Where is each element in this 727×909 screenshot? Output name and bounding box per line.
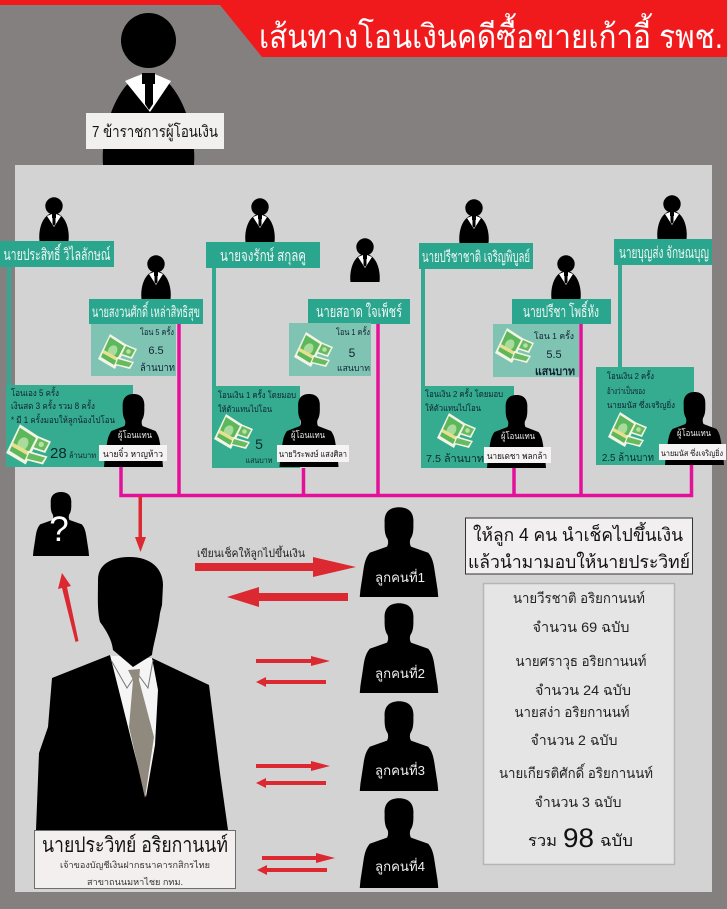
proxy figure: นายวิระพงษ์ แสงศิลา: ผู้โอนแทน	[291, 430, 325, 441]
panel: transfer details 3: ให้ตัวแทนไปโอน	[218, 404, 272, 414]
panel: cheque counts: จำนวน 69 ฉบับ	[532, 619, 630, 635]
figure: child 2: ลูกคนที่2	[375, 665, 425, 682]
caption: นายประวิทย์ อริยกานนท์: นายประวิทย์ อริยกานนท์	[42, 833, 228, 857]
panel: transfer details 4	[289, 323, 371, 376]
panel: transfer details 4: 5	[349, 346, 356, 360]
panel: transfer details 7: 2.5 ล้านบาท	[602, 452, 654, 464]
icon: person	[245, 198, 275, 242]
panel: transfer details 2: 6.5	[148, 345, 164, 357]
panel: transfer details 2: ล้านบาท	[140, 362, 175, 374]
panel: cheque counts: นายสง่า อริยกานนท์	[514, 704, 630, 720]
name label: นายจงรักษ์ สกุลคู	[220, 246, 306, 266]
column 5: นายปรีชาชาติ เจริญพิบูลย์	[419, 199, 533, 269]
figure: main account holder	[36, 557, 228, 830]
callout: instruction to children: ให้ลูก 4 คน นำเช็คไปขึ้นเงิน	[473, 522, 683, 546]
proxy figure: นายมนัส ซึ่งเจริญยิ่ง	[659, 392, 726, 465]
name label: นายประสิทธิ์ วิไลลักษณ์	[4, 243, 111, 264]
title banner	[0, 0, 727, 57]
icon: person	[141, 255, 171, 299]
proxy figure: นายวิระพงษ์ แสงศิลา: นายวิระพงษ์ แสงศิลา	[279, 449, 347, 459]
panel: transfer details 1	[6, 385, 133, 467]
panel: transfer details 1: * มี 1 ครั้งมอบให้ลูกน้องไปโอน	[11, 413, 115, 426]
panel: transfer details 3	[212, 386, 300, 468]
panel: cheque counts: จำนวน 3 ฉบับ	[534, 794, 622, 810]
column 3: นายจงรักษ์ สกุลคู	[206, 198, 320, 268]
panel: transfer details 6: แสนบาท	[535, 366, 575, 378]
arrows: child 3	[256, 761, 330, 788]
panel: transfer details 1: ล้านบาท	[69, 451, 96, 460]
panel: transfer details 2: โอน 5 ครั้ง	[140, 326, 174, 337]
proxy figure: นายเดชา พลกล้า: ผู้โอนแทน	[501, 431, 535, 442]
icon: person	[551, 255, 581, 299]
column 2: นายสงวนศักดิ์ เหล่าสิทธิสุข	[89, 255, 203, 324]
panel: transfer details 5: 7.5 ล้านบาท	[426, 453, 484, 465]
panel: cheque counts: จำนวน 24 ฉบับ	[535, 682, 631, 698]
panel: transfer details 1: โอนเอง 5 ครั้ง	[11, 386, 59, 398]
panel: transfer details 7	[596, 367, 694, 465]
name label: นายปรีชาชาติ เจริญพิบูลย์	[422, 248, 530, 267]
panel: transfer details 2	[91, 324, 176, 376]
panel: transfer details 4: แสนบาท	[337, 363, 370, 373]
icon: person	[459, 199, 489, 243]
panel: transfer details 3: 5	[255, 436, 263, 452]
arrows: child 4	[257, 853, 335, 875]
panel: cheque counts	[484, 584, 674, 864]
proxy figure: นายเดชา พลกล้า: นายเดชา พลกล้า	[487, 451, 547, 461]
icon: person	[350, 238, 380, 282]
panel: cheque counts: นายศราวุธ อริยกานนท์	[516, 653, 646, 670]
icon: person	[657, 195, 687, 239]
proxy figure: นายมนัส ซึ่งเจริญยิ่ง: ผู้โอนแทน	[677, 428, 711, 439]
icon: unknown person	[33, 492, 89, 556]
caption: นายประวิทย์ อริยกานนท์: สาขาถนนมหาไชย กทม.	[87, 877, 183, 887]
panel: cheque counts: ฉบับ	[600, 833, 633, 850]
panel: transfer details 6: 5.5	[546, 349, 562, 361]
column 4: นายสอาด ใจเพ็ชร์	[308, 238, 410, 324]
name label: นายปรีชา โพธิ์หัง	[523, 300, 599, 321]
panel: transfer details 7: นายมนัส ซึ่งเจริญยิ่ง	[607, 399, 675, 410]
panel: cheque counts: จำนวน 2 ฉบับ	[530, 732, 618, 748]
proxy figure: นายจิ๋ว หาญห้าว	[99, 394, 167, 467]
callout: instruction to children: แล้วนำมามอบให้นายประวิทย์	[468, 551, 690, 572]
panel: transfer details 5	[421, 386, 514, 468]
icon: person	[39, 197, 69, 241]
panel: transfer details 7: อ้างว่าเป็นของ	[607, 385, 645, 396]
figure: child 1: ลูกคนที่1	[375, 569, 425, 586]
panel: cheque counts: นายวีรชาติ อริยกานนท์	[513, 590, 645, 606]
arrows: child 1	[195, 557, 356, 607]
teal connector lines	[7, 265, 622, 386]
panel: transfer details 5: ให้ตัวแทนไปโอน	[425, 403, 481, 413]
panel: transfer details 1: เงินสด 3 ครั้ง รวม 8 ครั้ง	[11, 399, 95, 411]
panel: cheque counts: รวม	[528, 833, 557, 850]
column 7: นายบุญส่ง จักษณบุญ	[614, 195, 712, 265]
panel: transfer details 3: โอนเงิน 1 ครั้ง โดยมอบ	[218, 389, 296, 400]
main panel	[15, 165, 712, 892]
proxy figure: นายจิ๋ว หาญห้าว: ผู้โอนแทน	[118, 430, 152, 441]
icon: 7 officials figure with caption	[86, 13, 224, 165]
figure: child 1	[360, 507, 438, 597]
figure: child 2	[360, 603, 438, 693]
name label: นายสงวนศักดิ์ เหล่าสิทธิสุข	[92, 301, 200, 322]
figure: child 3: ลูกคนที่3	[375, 762, 425, 779]
figure: child 3	[360, 701, 438, 791]
caption: นายประวิทย์ อริยกานนท์: เจ้าของบัญชีเงินฝากธนาคารกสิกรไทย	[60, 860, 210, 870]
callout: instruction to children	[466, 518, 692, 574]
figure: child 4: ลูกคนที่4	[375, 858, 425, 875]
panel: transfer details 7: โอนเงิน 2 ครั้ง	[607, 370, 654, 381]
figure: child 4	[360, 798, 438, 888]
label: cheque note: เขียนเช็คให้ลูกไปขึ้นเงิน	[197, 545, 305, 560]
column 1: นายประสิทธิ์ วิไลลักษณ์	[0, 197, 114, 267]
magenta connector lines	[121, 324, 692, 496]
panel: cheque counts: 98	[563, 823, 594, 853]
proxy figure: นายเดชา พลกล้า	[484, 395, 551, 468]
panel: cheque counts: นายเกียรติศักดิ์ อริยกานนท์	[499, 763, 653, 781]
panel: transfer details 6	[493, 324, 579, 378]
arrows: child 2	[256, 656, 330, 687]
proxy figure: นายวิระพงษ์ แสงศิลา	[277, 394, 349, 467]
caption: นายประวิทย์ อริยกานนท์	[34, 830, 236, 888]
proxy figure: นายจิ๋ว หาญห้าว: นายจิ๋ว หาญห้าว	[103, 447, 163, 459]
panel: transfer details 5: โอนเงิน 2 ครั้ง โดยมอบ	[425, 388, 503, 399]
panel: transfer details 1: 28	[50, 445, 67, 462]
panel: transfer details 3: แสนบาท	[246, 456, 273, 465]
arrow: funds down to main account holder	[135, 496, 146, 552]
icon: unknown person: ?	[49, 510, 69, 549]
panel: transfer details 4: โอน 1 ครั้ง	[336, 326, 370, 337]
column 6: นายปรีชา โพธิ์หัง	[512, 255, 611, 324]
name label: นายสอาด ใจเพ็ชร์	[316, 301, 402, 321]
panel: transfer details 6: โอน 1 ครั้ง	[534, 330, 574, 341]
icon: 7 officials figure with caption: 7 ข้าราชการผู้โอนเงิน	[92, 122, 218, 142]
arrow: to unknown person	[58, 573, 78, 642]
